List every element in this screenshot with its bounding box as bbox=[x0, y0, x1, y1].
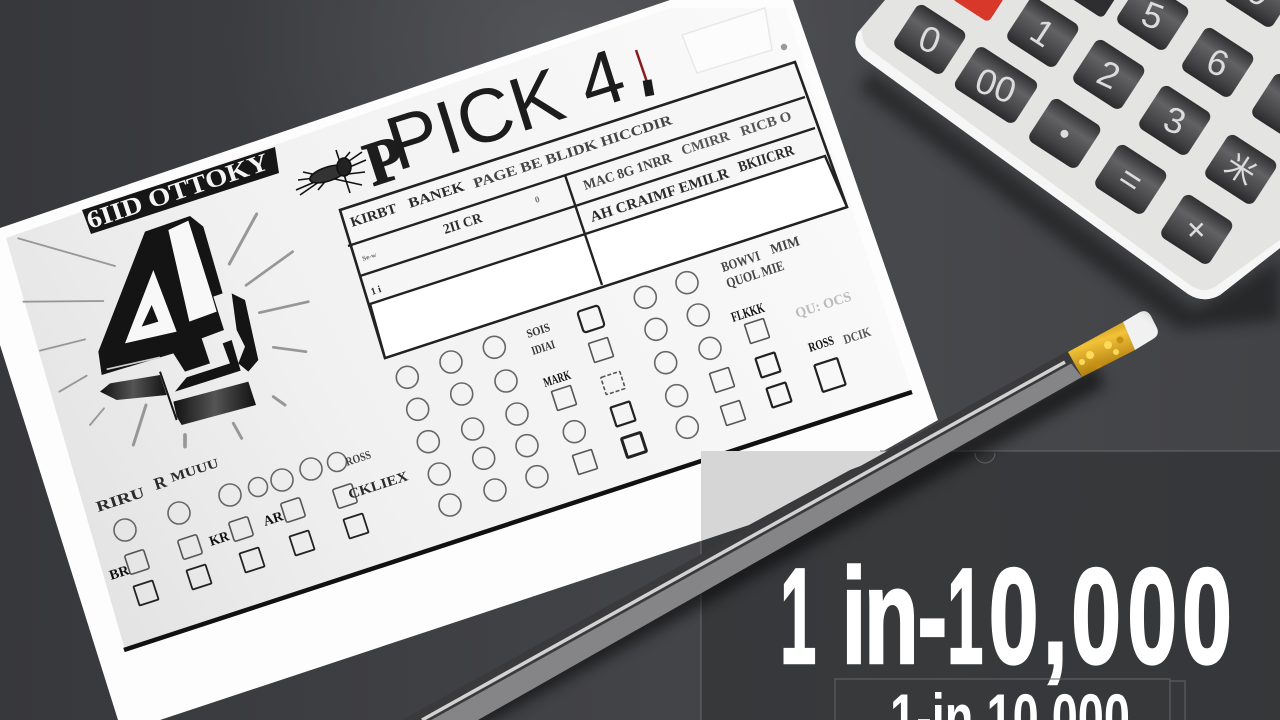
small ticket captions: AR bbox=[262, 509, 286, 530]
small ticket captions: BOWVI bbox=[720, 249, 762, 276]
check boxes: main grid bbox=[551, 305, 846, 475]
number bubbles: main grid bbox=[396, 272, 721, 516]
panel: lottery ticket bbox=[0, 0, 938, 720]
big 3D number 4 with rays bbox=[18, 214, 308, 447]
table text rows: AH CRAIMF EMILR bbox=[588, 166, 731, 226]
heading: PICK 4: P bbox=[356, 123, 413, 199]
big odds headline: 1 bbox=[947, 539, 983, 692]
pencil gold ferrule bbox=[1068, 322, 1135, 377]
small ticket captions: CKLIEX bbox=[347, 469, 410, 503]
small ticket captions: IDIAI bbox=[530, 337, 557, 358]
table text rows: PAGE BE BLIDK HICCDIR bbox=[472, 113, 675, 192]
small grey dot bbox=[781, 44, 787, 50]
table text rows: Se-w bbox=[361, 251, 378, 263]
key: decimal bbox=[1027, 96, 1103, 171]
blank stamp box bbox=[682, 8, 772, 73]
calculator body bbox=[855, 0, 1280, 299]
table text rows: 2II CR bbox=[442, 211, 485, 238]
table text rows: CMIRR bbox=[680, 129, 733, 159]
table text rows: BANEK bbox=[407, 180, 467, 212]
key: 6: 6 bbox=[1201, 40, 1235, 85]
key: 9 bbox=[1222, 0, 1280, 30]
key: symbol: 米 bbox=[1219, 148, 1262, 192]
table text rows bbox=[349, 109, 797, 298]
key: symbol bbox=[1203, 132, 1279, 207]
pencil shadow bbox=[440, 375, 1100, 720]
small ticket captions: MUUU bbox=[168, 455, 221, 485]
key: right edge bbox=[1250, 71, 1280, 146]
small ticket captions bbox=[94, 234, 873, 584]
small ticket captions: MIM bbox=[769, 234, 802, 258]
key: plus: + bbox=[1175, 207, 1219, 251]
calculator shadow bbox=[860, 70, 1280, 330]
pencil bbox=[402, 311, 1158, 720]
table text rows: KIRBT bbox=[349, 201, 400, 231]
key: 1 bbox=[1005, 0, 1081, 70]
key: plus bbox=[1159, 192, 1235, 267]
black lottery banner: 6IID OTTOKY bbox=[83, 149, 272, 235]
small ticket captions: MARK bbox=[541, 367, 573, 390]
number bubbles: lower left bbox=[114, 452, 346, 541]
calculator keys bbox=[892, 0, 1280, 267]
entry table bbox=[340, 62, 847, 358]
key: 1: 1 bbox=[1023, 10, 1062, 55]
heading: PICK 4: PICK 4 bbox=[377, 33, 635, 187]
check boxes: lower left bbox=[124, 483, 369, 606]
ticket inner printed area bbox=[6, 8, 912, 650]
ticket paper sheet bbox=[0, 0, 938, 720]
key: 0: 0 bbox=[913, 17, 947, 62]
key: equals: = bbox=[1111, 156, 1151, 202]
pencil upper facet bbox=[402, 351, 1074, 720]
calculator front bevel bbox=[855, 30, 1280, 299]
table text rows: 0 bbox=[534, 194, 541, 205]
small ticket captions: QU: OCS bbox=[794, 290, 854, 322]
key: 0 bbox=[892, 2, 968, 77]
numeral body bbox=[98, 216, 258, 425]
calculator bbox=[855, 0, 1280, 330]
key: 2: 2 bbox=[1091, 52, 1127, 97]
overlay tint on paper bbox=[701, 451, 900, 541]
big odds headline: in- bbox=[842, 541, 947, 693]
table text rows: MAC 8G 1NRR bbox=[582, 151, 675, 194]
pencil lower facet bbox=[412, 356, 1082, 720]
small ticket captions: SOIS bbox=[525, 320, 552, 341]
sunburst rays bbox=[18, 214, 308, 447]
small ticket captions: R bbox=[151, 472, 170, 494]
pencil highlight bbox=[422, 362, 1065, 720]
panel: odds overlay bbox=[701, 451, 1280, 720]
key: 3: 3 bbox=[1158, 98, 1192, 143]
key: 6 bbox=[1180, 25, 1256, 100]
small ticket captions: ROSS bbox=[344, 447, 373, 469]
key: 2 bbox=[1071, 37, 1147, 112]
small ticket captions: FLKKK bbox=[730, 301, 767, 326]
overlay frame lines bbox=[701, 451, 1280, 720]
key: upper small bbox=[1065, 0, 1119, 19]
small ticket captions: QUOL MIE bbox=[725, 259, 786, 292]
small ticket captions: DCIK bbox=[841, 324, 873, 347]
big odds headline bbox=[780, 539, 1232, 693]
table text rows: RICB O bbox=[739, 109, 794, 140]
big odds headline: 1 bbox=[780, 539, 816, 692]
key: 00 bbox=[952, 44, 1040, 126]
big odds headline: 0,000 bbox=[989, 541, 1232, 693]
key: 00: 00 bbox=[970, 59, 1022, 112]
key: equals bbox=[1093, 142, 1169, 217]
starburst emblem bbox=[296, 150, 366, 195]
pencil eraser bbox=[1123, 311, 1158, 350]
small ticket captions: ROSS bbox=[806, 333, 836, 355]
ticket bottom rule bbox=[124, 392, 912, 650]
key: 3 bbox=[1137, 83, 1213, 158]
key: red bbox=[951, 0, 1005, 23]
overlay tint on desk bbox=[701, 451, 1280, 720]
small ticket captions: RIRU bbox=[94, 485, 147, 516]
key: 5 bbox=[1115, 0, 1191, 53]
table text rows: 1 i bbox=[370, 284, 383, 298]
table text rows: BKIICRR bbox=[736, 143, 797, 176]
small ticket captions: BR bbox=[108, 563, 132, 584]
small ticket captions: KR bbox=[208, 529, 232, 550]
